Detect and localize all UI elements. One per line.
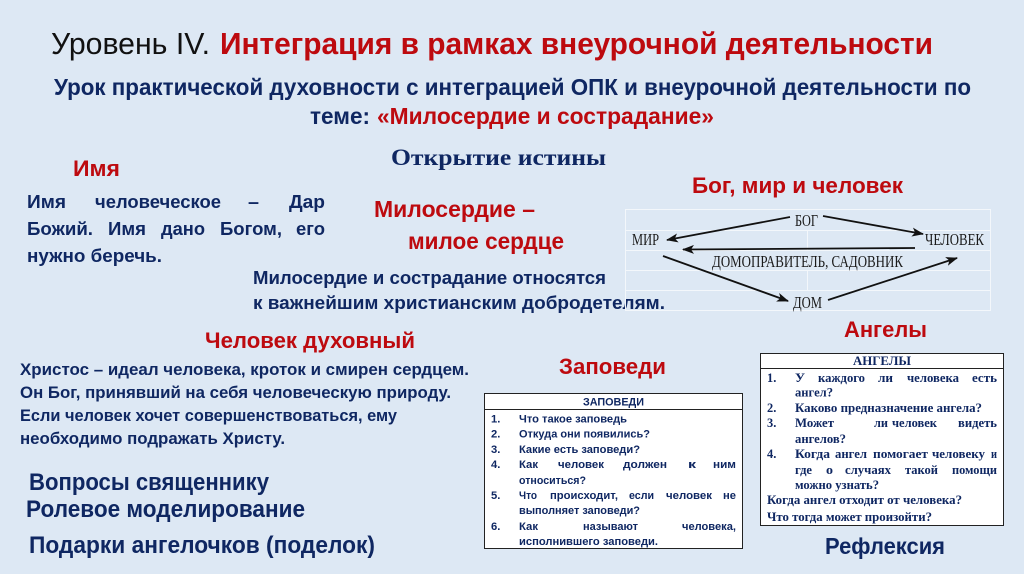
diagram: labels [632,211,984,312]
table: Ангелы [760,354,1004,526]
table: Заповеди: выполняет заповеди? [519,505,640,517]
table: Заповеди: Что [519,490,537,502]
text block: Христос: Если человек хочет совершенствоваться, ему [20,407,398,425]
table: Заповеди: исполнившего заповеди. [519,536,658,548]
heading: Заповеди: Заповеди [559,354,666,379]
table: Ангелы: ангел? [795,386,833,400]
table: Заповеди [484,394,743,548]
text block: Христос: Он Бог, принявший на себя человеческую природу. [20,384,451,402]
table: Заповеди: Как [519,459,538,471]
table: Ангелы: ли [874,416,888,430]
panel: Милосердие [253,196,665,313]
table: Ангелы: каждого [818,371,865,385]
table: Ангелы: о [826,463,833,477]
table: Заповеди: Как [519,521,538,533]
table: Заповеди: 6. [491,521,500,533]
heading: Человек духовный: Человек духовный [205,328,415,353]
diagram: labels: ЧЕЛОВЕК [925,230,984,249]
table: Заповеди: человека, [682,521,736,533]
diagram: labels: МИР [632,230,659,249]
table: Ангелы: ангелов? [795,432,846,446]
subtitle [54,74,971,129]
table: Заповеди: называют [583,521,639,533]
table: Заповеди: человек [558,459,604,471]
text block: Христос: необходимо подражать Христу. [20,430,285,448]
table: Ангелы: есть [972,371,997,385]
table: Ангелы: можно узнать? [795,478,879,492]
table: Заповеди: Откуда они появились? [519,428,650,440]
table: Ангелы: человека [907,371,959,385]
text block: Имя description: Имя [108,219,146,239]
table: Заповеди: к [688,459,697,471]
table: Заповеди: ним [713,459,736,471]
table: Ангелы: Что тогда может произойти? [767,510,932,524]
table: Заповеди: Какие есть заповеди? [519,444,640,456]
panel: Имя [27,156,325,266]
table: Заповеди: относиться? [519,475,586,487]
title: Интеграция в рамках внеурочной деятельности [220,26,933,61]
diagram: arrows [663,216,957,301]
table: Заповеди: 4. [491,459,500,471]
table: Заповеди: если [629,490,654,502]
diagram: labels: ДОМОПРАВИТЕЛЬ, САДОВНИК [712,252,903,271]
text block: Имя description: нужно беречь. [27,246,162,266]
table: Ангелы: видеть [958,416,997,430]
panel: Человек духовный [20,328,469,448]
subtitle: «Милосердие и сострадание» [377,103,714,129]
text block: Имя description [27,192,325,266]
table: Ангелы: 1. [767,371,776,385]
table: Ангелы: У [795,371,805,385]
table: Ангелы: человеку [932,447,986,461]
list: activities: Подарки ангелочков (поделок) [29,532,375,559]
heading: Милосердие — милое сердце [374,196,564,254]
text block: virtues: к важнейшим христианским добродетелям. [253,292,665,313]
panel: Бог, мир и человек [625,173,990,312]
text block: virtues [253,267,665,313]
list: activities: Вопросы священнику [29,469,270,496]
diagram: table grid [625,210,990,310]
list: activities: Ролевое моделирование [26,496,305,523]
table: Заповеди: происходит, [550,490,618,502]
diagram: labels: ДОМ [793,293,822,312]
table: Ангелы: такой [905,463,938,477]
heading: Открытие истины: Открытие истины [391,145,606,170]
subtitle: Урок практической духовности с интеграцией ОПК и внеурочной деятельности по [54,74,971,100]
table: Ангелы: ангел [835,447,867,461]
table: Ангелы: АНГЕЛЫ [853,354,911,368]
table: Заповеди: ЗАПОВЕДИ [583,396,644,408]
table: Заповеди: должен [623,459,667,471]
heading: Имя: Имя [73,156,120,181]
table: Ангелы: человек [892,416,938,430]
table: Заповеди: 2. [491,428,500,440]
heading: Рефлексия: Рефлексия [825,533,945,559]
text block: Христос: Христос – идеал человека, кроток и смирен сердцем. [20,361,469,379]
text block: Имя description: дано [161,219,205,239]
table: Заповеди: 1. [491,414,500,426]
table: Ангелы: где [795,463,813,477]
text block: Христос [20,361,469,448]
text block: Имя description: его [296,219,325,239]
table: Ангелы: 4. [767,447,776,461]
table: Ангелы: Когда [795,447,830,461]
heading: Бог, мир и человек: Бог, мир и человек [692,173,904,198]
text block: virtues: Милосердие и сострадание относятся [253,267,606,288]
heading: Милосердие — милое сердце: Милосердие – [374,196,535,222]
table: Ангелы: помогает [873,447,928,461]
table: Заповеди: не [723,490,736,502]
table: Ангелы: ли [878,371,893,385]
text block: Имя description: Имя [27,192,66,212]
text block: Имя description: Божий. [27,219,93,239]
table: Ангелы: Каково предназначение ангела? [795,401,982,415]
table: Ангелы: случаях [845,463,892,477]
table: Ангелы: 3. [767,416,776,430]
table: Ангелы: Может [795,416,834,430]
list: activities [26,469,375,559]
text block: Имя description: Дар [289,192,325,212]
title: Уровень IV. [51,26,210,61]
table: Ангелы: 2. [767,401,776,415]
diagram: labels: БОГ [795,211,818,230]
table: Заповеди: человек [666,490,712,502]
text block: Имя description: Богом, [220,219,282,239]
table: Заповеди: Что такое заповедь [519,414,627,426]
table: Ангелы: помощи [952,463,997,477]
table: Ангелы: и [991,447,997,461]
text block: Имя description: – [248,192,259,212]
heading: Милосердие — милое сердце: милое сердце [408,228,564,254]
text block: Имя description: человеческое [95,192,221,212]
table: Заповеди: 3. [491,444,500,456]
table: Заповеди: 5. [491,490,500,502]
table: Ангелы: Когда ангел отходит от человека? [767,493,962,507]
subtitle: теме: [310,103,370,129]
heading: Ангелы: Ангелы [844,317,927,342]
